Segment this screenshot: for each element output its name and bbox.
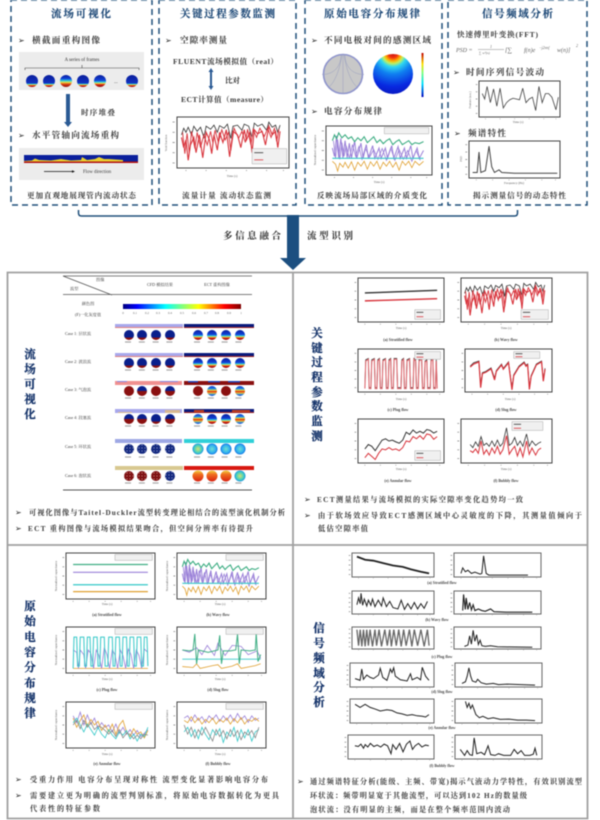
table: header: 图像 (96, 276, 105, 283)
heading: frequency analysis: 信号频域分析 (482, 7, 554, 20)
chart: plug capacitance: Time (s) (102, 677, 112, 681)
chart row: bubbly signals: (f) Bubbly flow (429, 764, 455, 768)
chart: time series: Time (s) (513, 120, 523, 124)
heading: vertical raw capacitance: 布 (24, 676, 36, 690)
bullets: frequency conclusions (297, 777, 582, 815)
bullet: void fraction (165, 34, 227, 45)
bullet: cross-section images: 横截面重构图像 (32, 34, 100, 45)
legend: colorbar: 0 (122, 311, 124, 315)
chart row: stratified signals: (a) Stratified flow (427, 581, 457, 585)
formula: PSD: [∑ (505, 47, 513, 54)
chart row: annular signals: (e) Annular flow (428, 726, 456, 730)
bullet: time series: ➢ (453, 68, 460, 77)
bullets: void conclusions: ➢ (304, 511, 311, 520)
legend: colorbar: 0.4 (168, 311, 172, 315)
heading: vertical frequency analysis: 信 (313, 621, 325, 635)
bullet: capacitance law: ➢ (311, 107, 318, 116)
panel: key process parameter box (159, 0, 296, 205)
formula: PSD (455, 43, 578, 55)
formula: PSD: PSD = (455, 48, 473, 54)
chart: wavy void: (b) Wavy flow (494, 338, 518, 342)
heading: vertical raw capacitance: 分 (24, 660, 36, 674)
bullets: capacitance conclusions: 代表性的特征参数 (30, 804, 101, 813)
heading: vertical raw capacitance: 容 (24, 645, 36, 659)
image: series of frames: ... (114, 80, 118, 85)
connector: merging bracket (78, 210, 518, 216)
heading: vertical process parameters: 键 (311, 341, 323, 355)
chart: wavy capacitance (165, 553, 266, 617)
heading: vertical process parameters: 关 (311, 326, 323, 340)
panel: raw capacitance box (305, 0, 442, 205)
chart: bubbly void (457, 419, 552, 483)
heading: vertical visualization: 可 (24, 377, 36, 391)
bullet: spectrum: 频谱特性 (468, 127, 506, 138)
chart row: bubbly signals (345, 735, 542, 768)
bullets: void conclusions: ECT测量结果与流场模拟的实际空隙率变化趋势均一致 (317, 495, 524, 504)
chart row: wavy signals (349, 591, 541, 622)
table: header: (F)一化灰度值 (75, 311, 102, 318)
bullets: frequency conclusions: 泡状流：没有明显的主频，而是在整个频率范围内波动 (310, 805, 511, 815)
caption: flow metering: 流量计量 流动状态监测 (182, 190, 271, 200)
chart row: plug signals: (c) Plug flow (432, 655, 453, 659)
formula: PSD: f(n)e (524, 47, 536, 54)
label: temporal stacking: 时序堆叠 (81, 107, 115, 117)
label: FFT: 快速傅里叶变换(FFT) (457, 29, 538, 39)
panel: frequency results (297, 553, 582, 815)
heading: vertical frequency analysis: 号 (313, 636, 325, 650)
formula: PSD: 1 (490, 44, 492, 49)
image: series of frames (19, 52, 144, 90)
chart row: annular signals (347, 699, 542, 730)
heading: vertical frequency analysis: 域 (313, 666, 325, 680)
heading: flow visualization: 流场可视化 (51, 7, 112, 20)
bullets: capacitance conclusions (15, 775, 281, 813)
chart row: slug signals (347, 663, 542, 694)
bullets: capacitance conclusions: ➢ (15, 791, 22, 800)
heading: vertical frequency analysis (313, 621, 325, 709)
heading: vertical frequency analysis: 分 (313, 680, 325, 694)
bullets: void conclusions (304, 495, 582, 533)
legend: colorbar: 0.6 (192, 311, 196, 315)
heading: vertical frequency analysis: 频 (313, 651, 325, 665)
chart: bubbly capacitance: Time (s) (215, 752, 225, 756)
heading: vertical process parameters: 程 (311, 370, 323, 384)
legend: colorbar: 0.9 (227, 311, 231, 315)
bullets: frequency conclusions: 环状流：频带明显宽于其他流型，可以达到102 Hz的数量级 (310, 791, 528, 801)
chart: plug capacitance: (c) Plug flow (97, 688, 118, 692)
bullets: visualization conclusions: 可视化图像与Taitel-Duckler流型转变理论相结合的流型演化机制分析 (29, 508, 285, 517)
row: case 5 annular (65, 439, 254, 457)
chart: slug capacitance: Normalized capacitance (165, 634, 169, 665)
heading: vertical raw capacitance: 规 (24, 691, 36, 705)
image: axial flow field (19, 148, 144, 180)
chart: stratified capacitance (54, 553, 155, 617)
row: case 6 bubbly: Case 6: 泡状流 (65, 472, 92, 479)
panel: signal frequency box (448, 0, 587, 205)
bullets: void conclusions: 低估空隙率值 (318, 524, 369, 533)
heading: vertical visualization: 视 (24, 392, 36, 406)
chart: annular capacitance: Normalized capacitance (54, 709, 58, 740)
chart: bubbly void: (f) Bubbly flow (493, 479, 519, 483)
chart row: stratified signals (349, 553, 541, 585)
heading: vertical visualization: 流 (24, 347, 36, 361)
legend: colorbar: 1 (240, 311, 242, 315)
row: case 2 wavy: Case 2: 波浪流 (65, 358, 92, 365)
chart: time series (468, 81, 560, 124)
table: header: ECT 重构图像 (204, 281, 231, 288)
chart: annular void: (e) Annular flow (384, 479, 412, 483)
heading: vertical process parameters: 测 (311, 429, 323, 443)
chart: slug void: (d) Slug flow (495, 408, 517, 412)
bullets: frequency conclusions: 通过频谱特征分析(能级、主频、带宽)揭示气液动力学特性，有效识别流型 (310, 777, 582, 787)
chart: spectrum: PSD (459, 155, 463, 162)
label: compare: 比对 (225, 75, 240, 85)
chart: stratified void (355, 278, 444, 342)
bullets: capacitance conclusions: ➢ (15, 775, 22, 784)
arrow: main flow down (280, 215, 306, 270)
formula: PSD: ∑ w²(n) (479, 51, 491, 55)
bullet: axial reconstruction: ➢ (18, 131, 25, 140)
heading: vertical frequency analysis: 析 (313, 695, 325, 709)
legend: colorbar: 0.5 (180, 311, 184, 315)
row: case 1 stratified (65, 324, 254, 342)
legend: colorbar: 0.8 (215, 311, 219, 315)
heading: vertical process parameters: 数 (311, 399, 323, 413)
panel frame: results grid (8, 272, 588, 818)
bullet: spectrum: ➢ (454, 129, 461, 138)
heading: vertical raw capacitance: 律 (24, 706, 36, 720)
heading: vertical visualization: 化 (24, 407, 36, 421)
caption: dynamics: 揭示测量信号的动态特性 (473, 190, 566, 200)
chart: plug void: (c) Plug flow (388, 408, 409, 412)
bullets: visualization conclusions: ECT 重构图像与流场模拟结果吻合，但空间分辨率有待提升 (28, 524, 253, 534)
chart: wavy capacitance: (b) Wavy flow (206, 613, 230, 617)
chart: stratified void: (a) Stratified flow (383, 338, 413, 342)
chart: plug void: Time (s) (396, 397, 406, 401)
chart: void fraction comparison: Time (s) (227, 174, 237, 178)
legend: colorbar: 0.3 (156, 311, 160, 315)
chart: slug void (462, 349, 552, 412)
panel: flow field visualization box (11, 0, 152, 205)
bullet: capacitance law: 电容分布规律 (324, 105, 382, 116)
row: case 3 plug: Case 3: 气泡流 (65, 386, 92, 393)
heading: vertical process parameters: 参 (311, 385, 323, 399)
row: case 2 wavy (65, 353, 254, 370)
bullets: frequency conclusions: ➢ (297, 777, 304, 786)
chart: plug capacitance: Normalized capacitance (54, 634, 58, 665)
caption: local media: 反映流场局部区域的介质变化 (317, 190, 427, 200)
chart: bubbly void: Time (s) (501, 467, 511, 471)
bullet: void fraction: 空隙率测量 (180, 34, 227, 45)
bullet: void fraction: ➢ (165, 36, 172, 45)
label: ECT value: ECT计算值（measure） (181, 94, 268, 104)
table: header: 流型 (70, 285, 78, 292)
chart: annular capacitance: Time (s) (102, 752, 112, 756)
chart: annular void (355, 419, 444, 483)
panel: void fraction results (304, 278, 582, 533)
row: case 5 annular: Case 5: 环状流 (65, 443, 92, 450)
chart: wavy void: Time (s) (501, 326, 511, 330)
heading: vertical raw capacitance: 始 (24, 614, 37, 628)
row: case 1 stratified: Case 1: 层状流 (65, 330, 92, 337)
chart: annular capacitance: (e) Annular flow (93, 762, 121, 766)
heading: vertical raw capacitance: 原 (24, 599, 36, 613)
chart: slug capacitance: Time (s) (215, 677, 225, 681)
label: flow pattern recognition: 流型识别 (307, 230, 353, 242)
bullet: axial reconstruction: 水平管轴向流场重构 (32, 129, 119, 140)
bullet: sensing regions: 不同电极对间的感测区域 (324, 34, 431, 45)
legend: colorbar: 0.7 (204, 311, 208, 315)
table: header: 颜色图 (82, 300, 94, 307)
row: case 4 slug (65, 409, 254, 426)
chart: plug capacitance (54, 627, 155, 692)
heading: vertical visualization: 场 (24, 362, 36, 376)
table: header (63, 276, 252, 490)
heading: vertical raw capacitance (24, 599, 37, 720)
bullet: spectrum (454, 127, 506, 138)
heading: vertical visualization (24, 347, 36, 421)
heading: raw capacitance: 原始电容分布规律 (324, 7, 420, 20)
chart: wavy capacitance: Time (s) (215, 602, 225, 606)
chart: slug capacitance (165, 627, 266, 692)
image: series of frames: A series of frames (65, 58, 100, 63)
icon: sensitivity map (373, 54, 413, 94)
heading: process parameters: 关键过程参数监测 (180, 7, 276, 20)
legend: colorbar: 0.2 (145, 311, 149, 315)
bullet: sensing regions: ➢ (311, 36, 318, 45)
chart: capacitance curves: Normalized capacitance (313, 134, 317, 165)
chart: capacitance curves: Time (s) (374, 180, 384, 184)
chart row: slug signals: (d) Slug flow (431, 690, 453, 694)
bullets: void conclusions: 由于软场效应导致ECT感测区域中心灵敏度的下降，其测量值倾向于 (318, 511, 582, 521)
chart: annular capacitance (54, 702, 155, 766)
chart: spectrum: Frequency (Hz) (504, 181, 524, 185)
chart: bubbly capacitance: Normalized capacitance (165, 709, 169, 740)
caption: flow state: 更加直观地展现管内流动状态 (27, 190, 137, 200)
chart: wavy capacitance: Normalized capacitance (165, 560, 169, 591)
icon: sensor cross section (322, 54, 364, 94)
chart row: wavy signals: (b) Wavy flow (425, 618, 449, 622)
arrow: temporal stacking (64, 94, 72, 127)
chart: stratified capacitance: Normalized capacitance (54, 560, 58, 591)
arrow: compare (208, 68, 214, 90)
bullet: cross-section images: ➢ (18, 36, 25, 45)
heading: vertical process parameters: 过 (311, 355, 323, 369)
heading: vertical process parameters: 监 (311, 414, 323, 428)
label: multi-info fusion: 多信息融合 (223, 230, 281, 242)
chart: capacitance curves (313, 126, 432, 184)
heading: vertical process parameters (311, 326, 323, 443)
chart: plug void (355, 349, 444, 412)
bullets: capacitance conclusions: 需要建立更为明确的流型判别标准，将原始电容数据转化为更具 (30, 791, 281, 801)
formula: PSD: −j2πnf (539, 46, 550, 50)
legend: colorbar: 0.1 (133, 311, 137, 315)
panel: capacitance results (15, 553, 281, 813)
chart: stratified capacitance: Time (s) (102, 602, 112, 606)
heading: vertical raw capacitance: 电 (24, 630, 36, 644)
chart: void fraction comparison (164, 117, 289, 178)
chart row: plug signals (349, 627, 541, 659)
chart: spectrum (459, 141, 560, 185)
chart: bubbly capacitance (165, 702, 266, 766)
row: case 6 bubbly (65, 466, 254, 483)
legend: colorbar (122, 304, 242, 315)
bullets: void conclusions: ➢ (304, 495, 311, 504)
formula: PSD: 2 (576, 43, 578, 48)
chart: annular void: Time (s) (396, 467, 406, 471)
chart: time series: Feature (a.u.) (468, 91, 472, 109)
bullets: visualization conclusions: ➢ (15, 524, 22, 533)
label: FLUENT value: FLUENT流场模拟值（real） (173, 56, 278, 66)
chart: void fraction comparison: Void fraction (164, 134, 168, 151)
panel: visualization results (15, 276, 285, 534)
chart: stratified capacitance: (a) Stratified flow (92, 613, 122, 617)
chart: wavy void (457, 278, 552, 342)
row: case 4 slug: Case 4: 段塞流 (65, 414, 92, 421)
chart: slug capacitance: (d) Slug flow (207, 688, 229, 692)
table: header: CFD 模拟结果 (147, 281, 174, 288)
chart: stratified void: Time (s) (396, 326, 406, 330)
bullets: visualization conclusions: ➢ (15, 508, 22, 517)
legend: color scale (422, 53, 424, 97)
bullet: time series: 时间序列信号波动 (466, 66, 544, 77)
chart: bubbly capacitance: (f) Bubbly flow (205, 762, 231, 766)
image: axial flow field: Flow direction (83, 170, 112, 175)
formula: PSD: w(n)] (557, 47, 571, 54)
row: case 3 plug (65, 381, 254, 398)
bullets: visualization conclusions (15, 508, 285, 534)
bullets: capacitance conclusions: 受重力作用 电容分布呈现对称性 流型变化显著影响电容分布 (30, 775, 268, 784)
chart: slug void: Time (s) (505, 397, 515, 401)
